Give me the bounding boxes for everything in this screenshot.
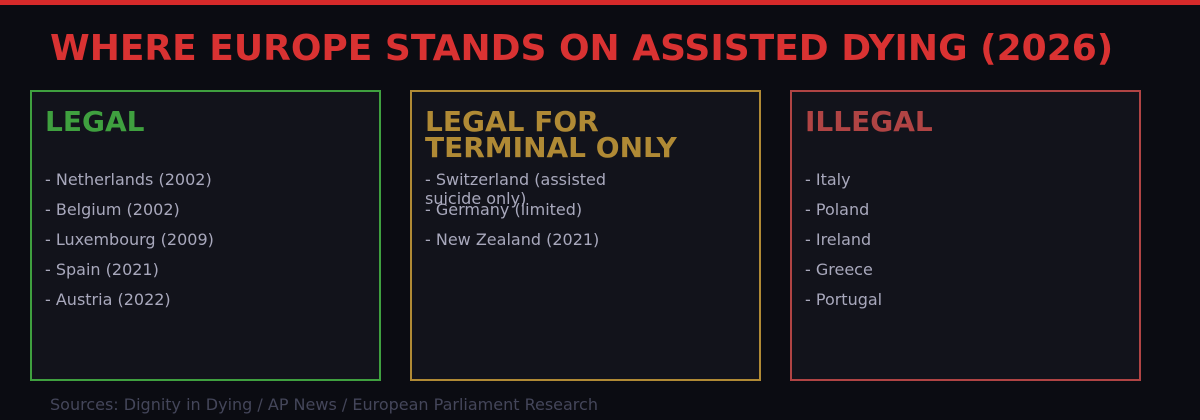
panel: legal for terminal only: LEGAL FOR <box>425 105 599 138</box>
panel: illegal <box>791 91 1140 380</box>
panel: legal <box>31 91 380 380</box>
panel: legal for terminal only: TERMINAL ONLY <box>425 131 677 164</box>
panel: legal: - Spain (2021) <box>45 260 159 279</box>
panel: legal for terminal only: - Germany (limited) <box>425 200 582 219</box>
panel: legal: - Luxembourg (2009) <box>45 230 214 249</box>
panel: illegal: - Italy <box>805 170 851 189</box>
title: WHERE EUROPE STANDS ON ASSISTED DYING (2026) <box>50 28 1113 69</box>
sources: Sources: Dignity in Dying / AP News / European Parliament Research <box>50 395 598 414</box>
panel: illegal: - Ireland <box>805 230 871 249</box>
panel: legal for terminal only: - New Zealand (2021) <box>425 230 599 249</box>
panel: illegal: - Poland <box>805 200 869 219</box>
panel: illegal: - Greece <box>805 260 873 279</box>
panel: legal: - Austria (2022) <box>45 290 171 309</box>
panel: legal: - Belgium (2002) <box>45 200 180 219</box>
panel: illegal: ILLEGAL <box>805 105 933 138</box>
panel: legal for terminal only: - Switzerland (assisted <box>425 170 606 189</box>
panel: legal for terminal only: suicide only) <box>425 189 526 208</box>
panel: illegal: - Portugal <box>805 290 882 309</box>
panel: legal: - Netherlands (2002) <box>45 170 212 189</box>
panel: legal for terminal only <box>411 91 760 380</box>
panel: legal: LEGAL <box>45 105 145 138</box>
